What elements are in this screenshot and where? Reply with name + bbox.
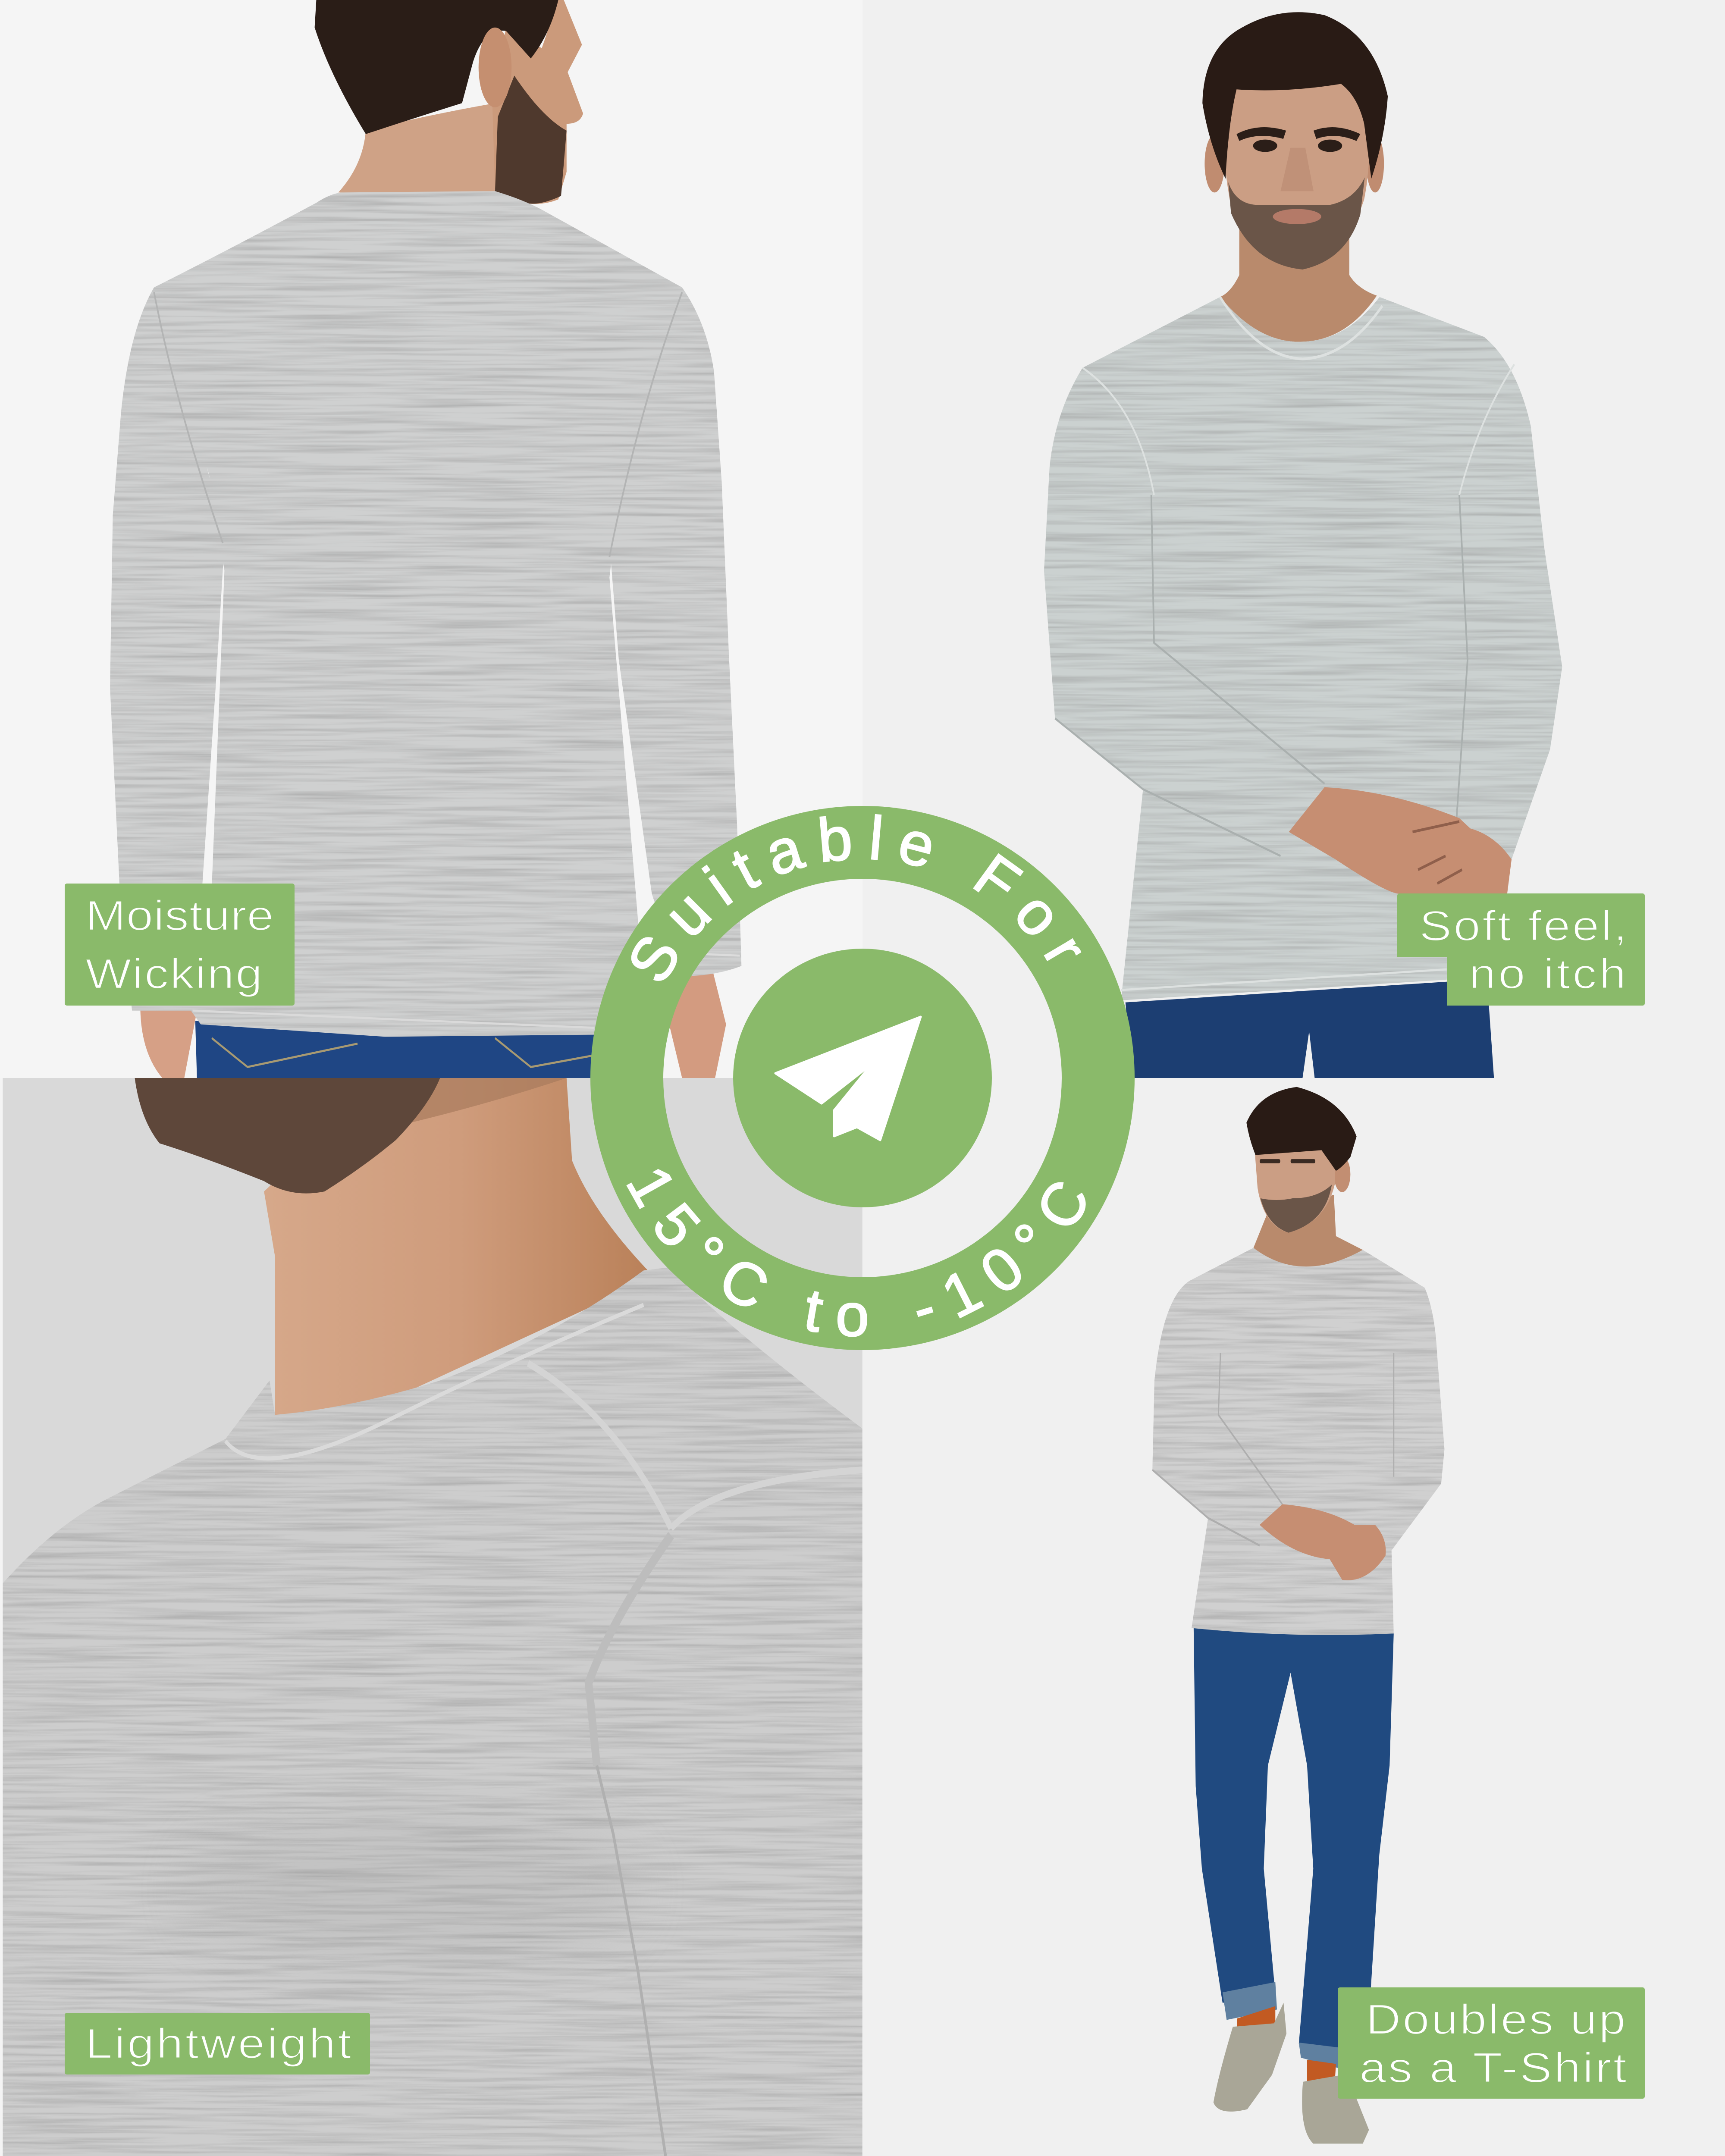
- figure: right hand: [667, 969, 726, 1078]
- figure: side of face: [492, 0, 583, 204]
- panel: full-length view: [862, 1078, 1725, 2156]
- figure: beard: [1228, 177, 1365, 270]
- armhole crease: [597, 1765, 665, 2156]
- figure: hair: [1202, 12, 1388, 179]
- figure: shirt: [1148, 1243, 1449, 1642]
- panel background: [862, 1078, 1725, 2156]
- panel: close-up of collar and shoulder: [0, 1078, 862, 2156]
- label: Doubles up as a T-Shirt: as a T-Shirt: [1359, 2044, 1627, 2091]
- label: Soft feel, no itch: no itch: [1469, 950, 1626, 997]
- label: Moisture Wicking: [65, 884, 295, 1006]
- jeans pocket stitching: [212, 1038, 594, 1067]
- figure: face: [1222, 82, 1371, 268]
- figure: jeans: [1194, 1628, 1394, 2054]
- badge ring: [590, 806, 1135, 1350]
- soft chest shadow: [182, 1814, 643, 1965]
- figure: neck: [338, 103, 495, 194]
- figure: ear: [479, 28, 511, 107]
- figure: beard: [495, 75, 567, 204]
- shirt seams: [1082, 297, 1514, 990]
- shirt seams: [154, 292, 740, 1028]
- figure: neck: [1254, 1195, 1363, 1270]
- figure: ears: [1204, 135, 1384, 192]
- figure: neck: [264, 1078, 655, 1418]
- figure: eyebrows and eyes: [1236, 127, 1360, 152]
- label: Lightweight: [65, 2013, 370, 2075]
- figure: orange socks: [1237, 2006, 1336, 2083]
- badge centre disc: [733, 949, 992, 1207]
- collar stitching: [226, 1305, 643, 1458]
- figure: shirt: [0, 1257, 862, 2156]
- label: Soft feel, no itch: [1397, 893, 1645, 1006]
- figure: shirt: [1028, 289, 1578, 1011]
- badge: Suitable For 15°C to -10°C: [590, 803, 1135, 1350]
- figure: eyes: [1260, 1159, 1315, 1163]
- figure: nose and lips: [1280, 148, 1314, 191]
- panel background: [862, 0, 1725, 1078]
- badge text: bottom arc: 15°C to -10°C: [614, 1154, 1112, 1349]
- icon: paper plane: [775, 1017, 921, 1140]
- figure: beard: [135, 1078, 440, 1194]
- panel background: [0, 1078, 862, 2156]
- label: Moisture Wicking: Moisture: [85, 892, 274, 939]
- figure: stubble: [396, 1078, 567, 1126]
- shoulder seams: [528, 1363, 862, 1765]
- figure: left hand: [140, 1005, 198, 1078]
- arm creases: [1055, 495, 1468, 856]
- figure: jeans: [195, 1021, 597, 1078]
- figure: hair: [315, 0, 558, 134]
- figure: shoes: [1214, 2002, 1369, 2143]
- left edge strip: [0, 1078, 3, 2156]
- figure: rolled cuffs: [1223, 1982, 1338, 2068]
- figure: face: [1255, 1150, 1336, 1233]
- arm creases: [1152, 1353, 1394, 1545]
- figure: hair: [1246, 1087, 1357, 1171]
- figure: ear: [1334, 1156, 1350, 1192]
- panel: front view of shirt: [862, 0, 1725, 1078]
- badge text: top arc: Suitable For: [614, 803, 1107, 994]
- panel: back view of shirt: [110, 0, 742, 1078]
- label: Lightweight: Lightweight: [85, 2020, 351, 2067]
- label: Soft feel, no itch: Soft feel,: [1419, 903, 1627, 950]
- label: Moisture Wicking: Wicking: [85, 950, 263, 997]
- label: Doubles up as a T-Shirt: Doubles up: [1366, 1996, 1626, 2043]
- figure: beard: [1261, 1185, 1332, 1233]
- label: Doubles up as a T-Shirt: [1338, 1987, 1645, 2099]
- figure: jeans: [1126, 976, 1494, 1078]
- finger lines: [1413, 821, 1462, 884]
- figure: clasped hands: [1289, 787, 1512, 894]
- figure: shirt: [0, 138, 862, 1078]
- figure: neck: [1220, 227, 1377, 342]
- panel background: [0, 0, 862, 1078]
- figure: clasped hands: [1260, 1504, 1386, 1580]
